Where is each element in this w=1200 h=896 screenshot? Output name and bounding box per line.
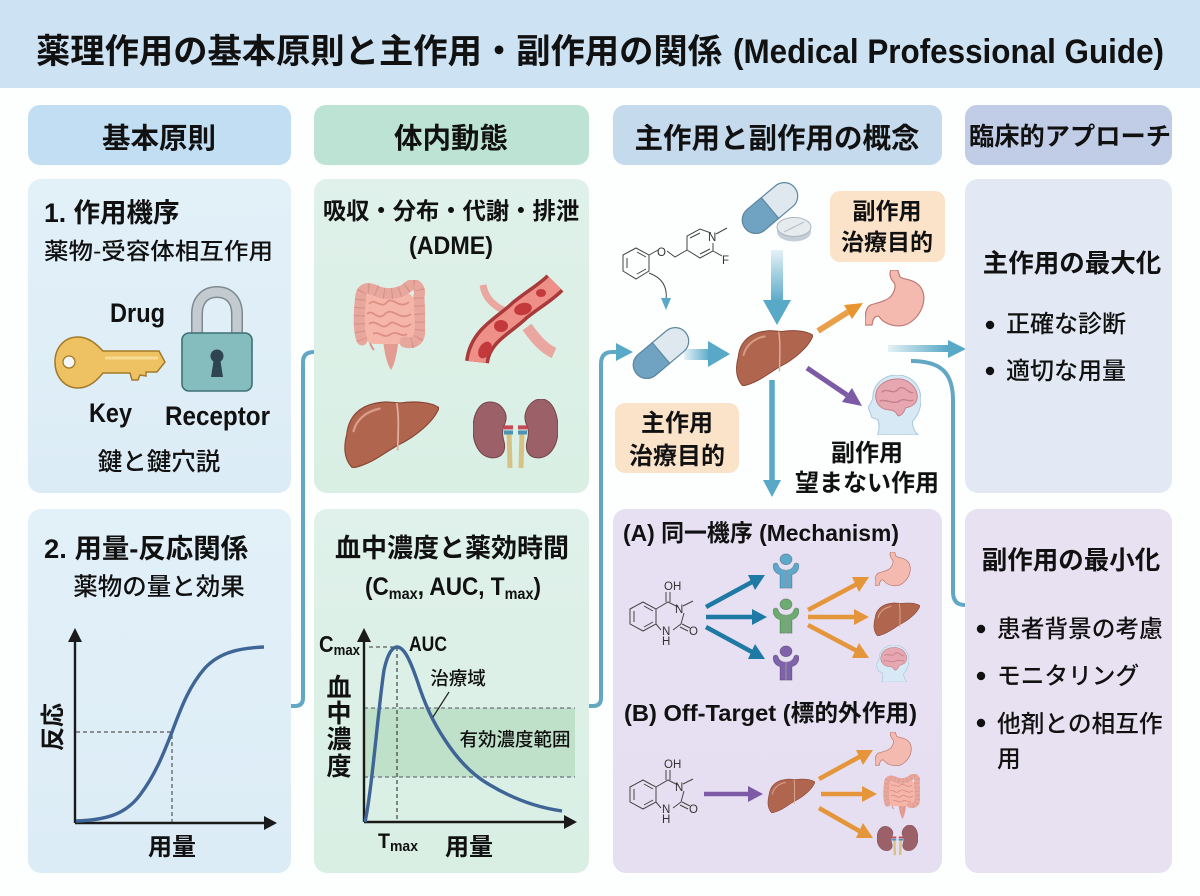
bullet list <box>986 311 1126 385</box>
callout: 主作用 治療目的: 治療目的 <box>629 443 725 470</box>
arrow: liver downward <box>763 380 781 497</box>
icon: head A <box>876 645 909 682</box>
arrows: receptors to organs <box>808 577 869 658</box>
heading: 主作用の最大化: 主作用の最大化 <box>983 250 1161 278</box>
molecule A: O <box>689 626 698 638</box>
icon: stomach A <box>875 552 910 586</box>
icon: intestine B <box>886 776 918 819</box>
panel: plasma concentration <box>314 509 589 873</box>
bullet list: 用 <box>997 747 1021 773</box>
chart: concentration time curve <box>319 628 577 861</box>
label: Cmax: max <box>334 642 361 659</box>
icon: left capsule <box>628 322 694 384</box>
panel: maximize main effect <box>965 179 1172 493</box>
axis label: 血中濃度 <box>326 674 352 781</box>
label: 治療域: 治療域 <box>430 668 486 689</box>
section: main and side effect concept <box>615 177 945 497</box>
axis label: 用量: 用量 <box>148 834 196 861</box>
heading: (A) mechanism: (A) 同一機序 (Mechanism) <box>623 520 899 546</box>
heading: 副作用の最小化: 副作用の最小化 <box>982 547 1160 575</box>
bullet list: 患者背景の考慮 <box>997 616 1163 643</box>
subheading: Cmax AUC Tmax: max <box>505 586 534 603</box>
molecule: pyridine ether: N <box>708 232 716 244</box>
molecule B: O <box>689 804 698 816</box>
callout: 副作用 治療目的: 治療目的 <box>841 229 933 255</box>
icon: key <box>55 337 165 388</box>
title bar <box>0 0 1200 88</box>
connector: column 2 to column 3 <box>589 343 633 706</box>
subheading: drug receptor interaction: 薬物-受容体相互作用 <box>44 238 273 264</box>
subheading: Cmax AUC Tmax: ) <box>533 573 541 601</box>
column header: 体内動態 <box>314 105 589 165</box>
panel: minimize side effects <box>965 509 1172 873</box>
subheading: amount and effect: 薬物の量と効果 <box>73 573 245 601</box>
column header: 主作用と副作用の概念 <box>613 105 942 165</box>
icon: stomach <box>865 270 924 326</box>
molecule A: OH <box>664 581 681 593</box>
icon: liver <box>345 402 439 468</box>
heading: 作用機序: 1. 作用機序 <box>44 198 179 228</box>
callout: 主作用 治療目的: 主作用 <box>641 410 713 437</box>
molecule: pyridine ether: O <box>657 247 666 259</box>
molecule B: N <box>662 804 670 816</box>
arrow: concept to maximize <box>888 340 966 358</box>
axis label: 血中濃度: 濃 <box>326 726 352 754</box>
icon: top capsule <box>737 177 803 239</box>
connector: concept to minimize <box>911 361 965 605</box>
label: Key: Key <box>89 398 132 428</box>
axis label: 用量: 用量 <box>445 834 493 861</box>
connector: column 1 to column 2 <box>291 352 314 706</box>
panel: ADME: (ADME) <box>409 232 493 260</box>
icon: blood vessel <box>475 283 555 362</box>
column header: 臨床的アプローチ <box>965 105 1172 165</box>
icon: intestine <box>359 285 420 370</box>
icon: kidneys B <box>877 825 918 855</box>
label: Drug: Drug <box>110 298 165 328</box>
icon: kidneys <box>473 399 558 468</box>
column header: 基本原則 <box>28 105 291 165</box>
bullet list: モニタリング <box>997 663 1139 690</box>
bullet list <box>977 616 1163 773</box>
callout: 副作用 治療目的: 副作用 <box>852 198 922 224</box>
icon: liver B <box>768 779 815 813</box>
column header: 臨床的アプローチ: 臨床的アプローチ <box>969 123 1171 151</box>
arrows: liver to organs <box>819 750 877 838</box>
icon: liver A <box>874 603 920 636</box>
arrow: liver to brain <box>807 368 862 406</box>
axis label: 血中濃度: 血 <box>326 674 352 702</box>
molecule B <box>630 759 698 826</box>
panel: ADME <box>314 179 589 493</box>
icon: tablet <box>777 218 811 242</box>
arrows: molecule to receptors <box>706 575 767 659</box>
molecule A: H <box>662 636 670 648</box>
arrow: molecule to capsule <box>661 298 671 310</box>
chart: dose response curve <box>40 628 277 861</box>
heading: (B) off-target: (B) Off-Target (標的外作用) <box>624 700 917 726</box>
molecule: pyridine ether: F <box>722 255 729 267</box>
callout: 主作用 治療目的 <box>615 403 739 473</box>
axis label: Tmax: T <box>378 830 391 853</box>
bullet list: 他剤との相互作 <box>997 711 1163 738</box>
arrow: molecule to liver <box>704 786 763 802</box>
bullet list: 正確な診断 <box>1006 311 1126 338</box>
axis label: Tmax: max <box>390 838 419 855</box>
label: AUC: AUC <box>409 633 447 656</box>
title bar: 薬理作用の基本原則と主作用・副作用の関係 <box>36 33 722 71</box>
label: Receptor: Receptor <box>165 401 270 431</box>
heading: 用量-反応関係: 2. 用量-反応関係 <box>44 534 248 564</box>
title bar: (Medical Professional Guide) <box>733 33 1164 71</box>
icon: purple receptor <box>773 646 799 680</box>
molecule B: OH <box>664 759 681 771</box>
panel: side effect mechanisms <box>613 509 942 873</box>
axis label: 反応: 反応 <box>40 703 67 751</box>
label: 副作用 望まない作用: 望まない作用 <box>795 470 939 497</box>
icon: padlock <box>182 292 252 391</box>
molecule B: H <box>662 814 670 826</box>
column header: 基本原則: 基本原則 <box>102 123 216 155</box>
subheading: Cmax AUC Tmax: (C <box>365 573 391 601</box>
bullet list: 適切な用量 <box>1006 358 1126 385</box>
axis label: 血中濃度: 度 <box>326 753 352 781</box>
icon: stomach B <box>875 732 911 766</box>
label: 副作用 望まない作用: 副作用 <box>831 440 903 467</box>
molecule A: N <box>675 604 683 616</box>
panel: dose response <box>28 509 291 873</box>
subheading: Cmax AUC Tmax: max <box>389 586 418 603</box>
molecule B: N <box>675 782 683 794</box>
molecule: pyridine ether <box>623 228 729 300</box>
icon: head and brain <box>868 375 921 435</box>
heading: 血中濃度と薬効時間: 血中濃度と薬効時間 <box>335 533 569 563</box>
heading: ADME: 吸収・分布・代謝・排泄 <box>323 198 579 224</box>
label: 副作用 望まない作用 <box>795 440 939 497</box>
icon: blue receptor <box>773 554 799 588</box>
axis label: 血中濃度: 中 <box>326 700 352 728</box>
icon: liver center <box>737 331 813 386</box>
column header: 主作用と副作用の概念: 主作用と副作用の概念 <box>634 123 920 155</box>
label: Cmax: C <box>319 631 336 657</box>
arrow: capsule to liver <box>684 341 730 367</box>
panel: action mechanism <box>28 179 291 493</box>
icon: green receptor <box>773 599 799 633</box>
column header: 体内動態: 体内動態 <box>394 123 508 155</box>
arrow: tablet to liver <box>763 250 791 325</box>
molecule A: N <box>662 626 670 638</box>
subheading: Cmax AUC Tmax: , AUC, T <box>418 573 505 601</box>
label: 有効濃度範囲: 有効濃度範囲 <box>459 729 571 750</box>
molecule A <box>630 581 698 648</box>
callout: 副作用 治療目的 <box>830 191 945 262</box>
arrow: liver to stomach <box>818 303 863 331</box>
caption: lock and key theory: 鍵と鍵穴説 <box>98 448 220 476</box>
